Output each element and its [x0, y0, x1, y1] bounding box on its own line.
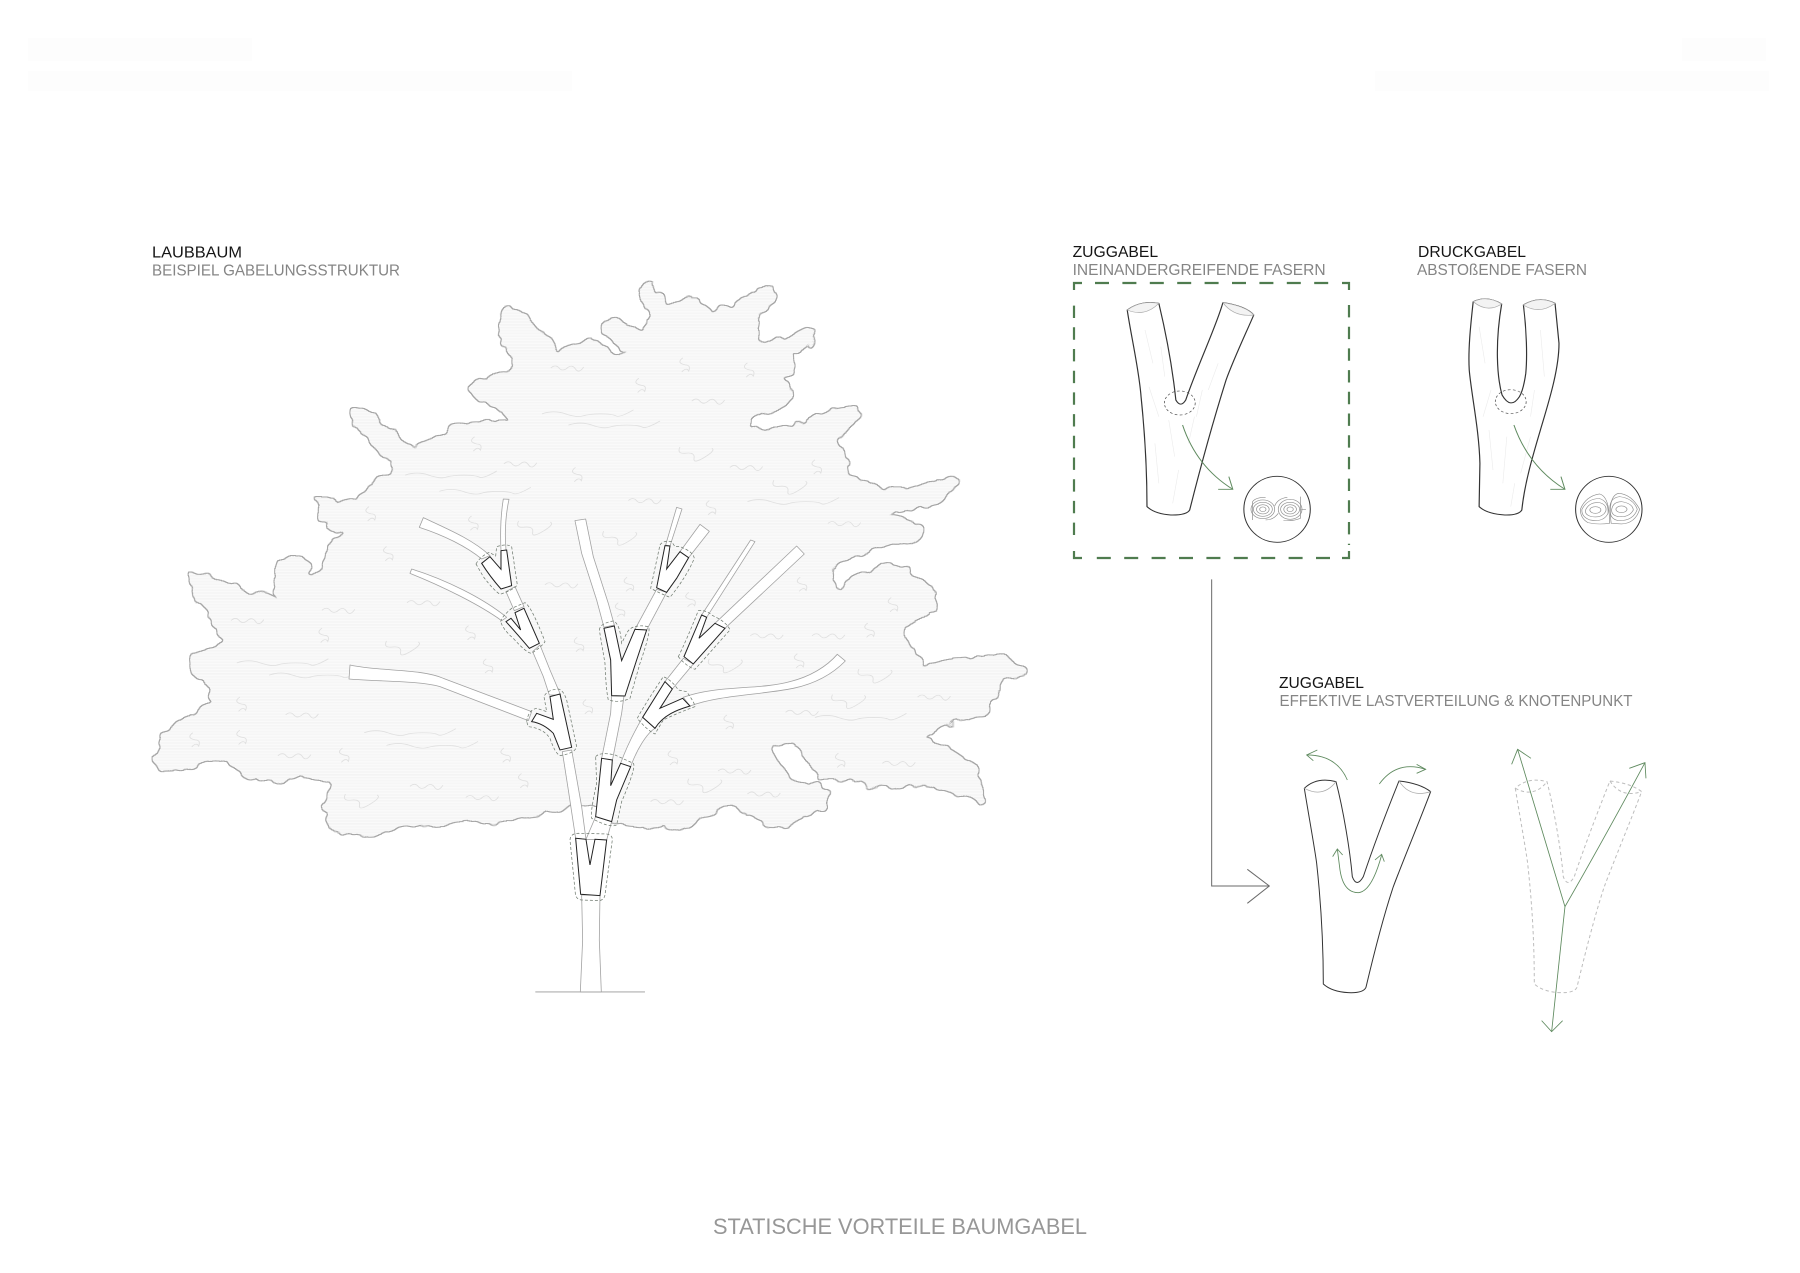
heading: Zuggabel ineinandergreifende Fasern: INEINANDERGREIFENDE FASERN	[1073, 262, 1326, 279]
cross-section: repelling fibres	[1576, 476, 1642, 542]
trunk	[580, 895, 601, 992]
tree canopy with hatching	[152, 280, 1028, 838]
heading: Druckgabel: DRUCKGABEL	[1418, 244, 1526, 261]
heading: Zuggabel Lastverteilung	[1279, 675, 1633, 710]
heading: Laubbaum: BEISPIEL GABELUNGSSTRUKTUR	[152, 262, 400, 280]
heading: Laubbaum	[152, 244, 400, 280]
title: STATISCHE VORTEILE BAUMGABEL	[713, 1214, 1087, 1239]
force diagram	[1512, 749, 1646, 1032]
green dashed highlight box	[1074, 283, 1349, 558]
arrow to cross-section	[1514, 425, 1565, 489]
heading: Zuggabel Lastverteilung: EFFEKTIVE LASTVERTEILUNG & KNOTENPUNKT	[1280, 693, 1633, 710]
tree trunk, branches and forks	[349, 499, 845, 992]
weak point marker	[1495, 390, 1526, 414]
cross-section: interlocking fibres	[1244, 476, 1310, 542]
diagrams: load distribution	[1304, 749, 1646, 1032]
dark fork segments	[482, 546, 725, 896]
heading: Zuggabel ineinandergreifende Fasern: ZUGGABEL	[1073, 244, 1159, 261]
load arrows	[1307, 750, 1426, 893]
compression fork drawing	[1469, 299, 1559, 515]
weak point marker	[1164, 391, 1195, 415]
heading: Druckgabel	[1417, 244, 1587, 279]
branches	[349, 499, 845, 840]
heading: Laubbaum: LAUBBAUM	[152, 244, 242, 262]
ground line	[535, 991, 645, 993]
header left: faint redacted text	[28, 38, 572, 91]
header right: faint redacted text	[1375, 38, 1769, 91]
tension fork drawing	[1127, 302, 1254, 515]
fork with load arrows	[1304, 780, 1431, 993]
dashed fork surrounds	[476, 541, 730, 901]
heading: Druckgabel: ABSTOßENDE FASERN	[1417, 262, 1587, 279]
diagrams: tension and compression fork	[1127, 299, 1642, 542]
heading: Zuggabel Lastverteilung: ZUGGABEL	[1279, 675, 1364, 692]
arrow to cross-section	[1183, 425, 1233, 489]
heading: Zuggabel ineinandergreifende Fasern	[1073, 244, 1326, 279]
connector arrow	[1212, 579, 1269, 903]
